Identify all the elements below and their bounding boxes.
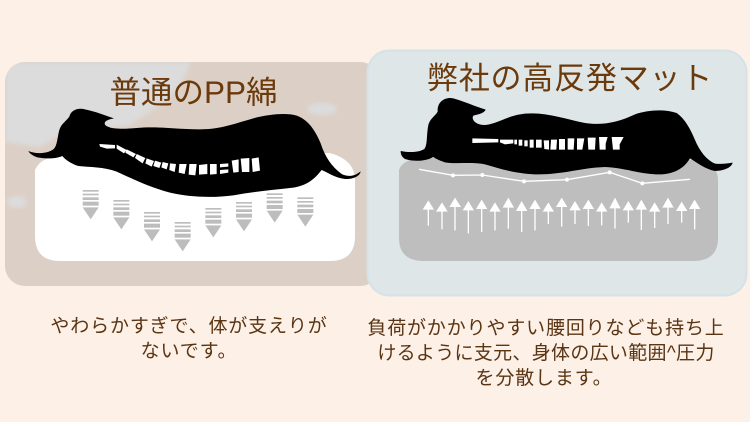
body silhouette: sinking	[28, 109, 361, 197]
caption: right line 3: を分散します。	[475, 367, 613, 389]
arrows: pushing upward	[423, 198, 700, 233]
heading: high-rebound mat: 弊社の高反発マット	[427, 61, 713, 96]
mattress: soft white	[35, 153, 355, 261]
pressure line	[419, 169, 690, 185]
panel: standard PP cotton	[5, 62, 380, 286]
spine: straight	[472, 137, 624, 150]
caption: right: 負荷がかかりやすい腰回りなども持ち上	[367, 317, 725, 339]
caption: left line 2: ないです。	[141, 341, 237, 362]
mattress: firm grey	[399, 158, 718, 261]
panel: high-rebound mat	[368, 50, 746, 296]
heading: PP cotton: 普通のPP綿	[109, 74, 278, 110]
arrows: sinking downward	[83, 190, 313, 251]
caption: left: やわらかすぎで、体が支えりが	[50, 315, 328, 337]
spine: bent	[99, 144, 260, 175]
body silhouette: supported	[401, 98, 733, 174]
caption: right line 2: けるように支元、身体の広い範囲^圧力	[377, 342, 715, 364]
